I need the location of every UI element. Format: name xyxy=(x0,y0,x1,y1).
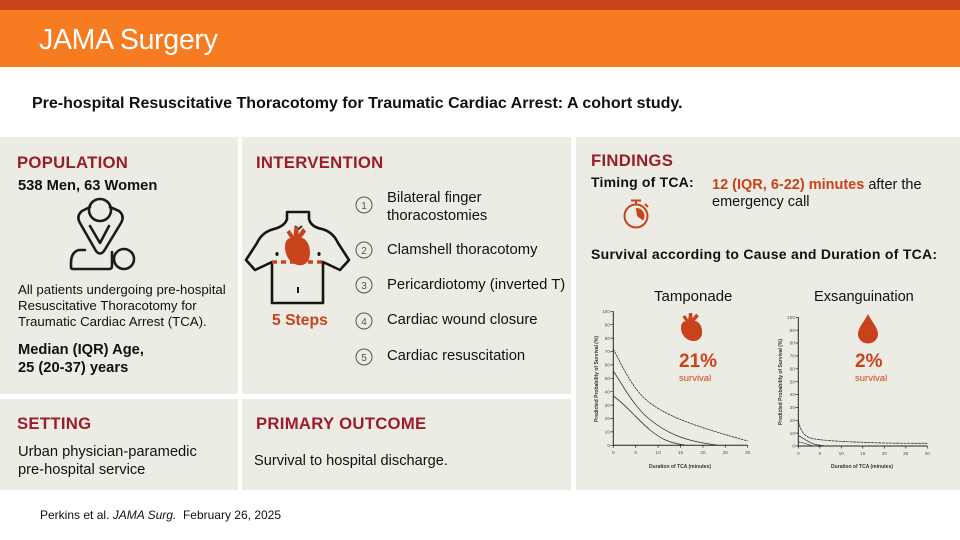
step markers xyxy=(356,196,372,366)
chart: exsanguination survival curve: Predicted Probability of Survival (%) xyxy=(778,339,784,425)
header band xyxy=(0,0,960,67)
icon: blood drop xyxy=(858,314,878,344)
chart: tamponade survival curve: 40 xyxy=(605,389,610,395)
chart: tamponade survival curve: 60 xyxy=(605,363,610,369)
exsanguination percent: 2% xyxy=(855,351,882,372)
chart: tamponade survival curve: 90 xyxy=(605,322,610,328)
chart: exsanguination survival curve: 90 xyxy=(790,328,795,334)
median age: Median (IQR) Age, xyxy=(18,342,144,358)
tamponade survival label: survival xyxy=(679,373,711,384)
panel: population xyxy=(0,137,238,394)
chart: exsanguination survival curve: 15 xyxy=(860,451,866,457)
survival subheading: Survival according to Cause and Duration of TCA: xyxy=(591,246,937,262)
step 1: thoracostomies xyxy=(387,208,487,224)
five steps label: 5 Steps xyxy=(272,312,328,329)
step 4: Cardiac wound closure xyxy=(387,312,538,328)
chart: exsanguination survival curve: 30 xyxy=(925,451,930,457)
chart: exsanguination survival curve xyxy=(778,315,930,470)
timing value xyxy=(712,177,922,210)
chart: exsanguination survival curve: 100 xyxy=(787,315,795,321)
main title: Pre-hospital Resuscitative Thoracotomy for Traumatic Cardiac Arrest: A cohort study. xyxy=(32,95,683,112)
chart: tamponade survival curve: 15 xyxy=(678,450,683,456)
chart: tamponade survival curve: 0 xyxy=(607,443,610,449)
panel: intervention xyxy=(242,137,571,394)
chart: tamponade survival curve: Predicted Probability of Survival (%) xyxy=(594,336,600,422)
setting heading: SETTING xyxy=(17,414,91,433)
step markers: 1 xyxy=(361,201,367,212)
timing value: emergency call xyxy=(712,194,810,210)
icon: stopwatch xyxy=(624,200,649,228)
chart: tamponade survival curve: 20 xyxy=(700,450,706,456)
chart: exsanguination survival curve: Duration of TCA (minutes) xyxy=(831,464,893,470)
findings heading: FINDINGS xyxy=(591,151,673,170)
step markers: 3 xyxy=(361,281,367,292)
chart: tamponade survival curve: 80 xyxy=(605,336,610,342)
chart: tamponade survival curve: 0 xyxy=(612,450,615,456)
step 1: Bilateral finger xyxy=(387,190,482,206)
chart: tamponade survival curve: 5 xyxy=(634,450,637,456)
chart: exsanguination survival curve: 0 xyxy=(792,444,795,450)
panel: setting xyxy=(0,399,238,490)
chart: exsanguination survival curve: 40 xyxy=(790,392,795,398)
step markers: 4 xyxy=(361,317,367,328)
chart: exsanguination survival curve: 70 xyxy=(790,354,795,360)
step markers: 5 xyxy=(361,353,367,364)
outcome heading: PRIMARY OUTCOME xyxy=(256,414,426,433)
population description: Traumatic Cardiac Arrest (TCA). xyxy=(18,314,207,329)
setting text: pre-hospital service xyxy=(18,462,145,478)
panel: findings xyxy=(576,137,960,490)
exsanguination label: Exsanguination xyxy=(814,289,914,305)
journal name: JAMA Surgery xyxy=(39,24,218,56)
chart: tamponade survival curve: 50 xyxy=(605,376,610,382)
chart: tamponade survival curve: 100 xyxy=(602,309,610,315)
chart: tamponade survival curve: 30 xyxy=(745,450,751,456)
chart: tamponade survival curve: 20 xyxy=(605,416,610,422)
chart: exsanguination survival curve: 10 xyxy=(790,431,795,437)
chart: exsanguination survival curve: 0 xyxy=(797,451,800,457)
tamponade percent: 21% xyxy=(679,351,717,372)
chart: tamponade survival curve: 10 xyxy=(605,430,610,436)
step 2: Clamshell thoracotomy xyxy=(387,242,538,258)
step 3: Pericardiotomy (inverted T) xyxy=(387,277,565,293)
chart: tamponade survival curve xyxy=(594,309,751,470)
step 5: Cardiac resuscitation xyxy=(387,348,525,364)
chart: tamponade survival curve: 70 xyxy=(605,349,610,355)
chart: tamponade survival curve: 10 xyxy=(655,450,661,456)
population description: All patients undergoing pre-hospital xyxy=(18,282,226,297)
chart: exsanguination survival curve: 80 xyxy=(790,341,795,347)
population counts: 538 Men, 63 Women xyxy=(18,178,157,194)
median age xyxy=(18,342,144,376)
timing label: Timing of TCA: xyxy=(591,174,694,190)
tamponade label: Tamponade xyxy=(654,288,732,305)
population description xyxy=(18,282,226,329)
step markers: 2 xyxy=(361,246,367,257)
chart: exsanguination survival curve: 20 xyxy=(790,418,795,424)
icon: heart xyxy=(681,313,702,341)
icon: CPR xyxy=(70,198,136,270)
header top stripe xyxy=(0,0,960,10)
setting text xyxy=(18,444,197,478)
chart: tamponade survival curve: 25 xyxy=(723,450,728,456)
setting text: Urban physician-paramedic xyxy=(18,444,197,460)
chart: exsanguination survival curve: 60 xyxy=(790,366,795,372)
chart: exsanguination survival curve: 30 xyxy=(790,405,795,411)
step 1 xyxy=(387,190,487,224)
chart: exsanguination survival curve: 5 xyxy=(818,451,821,457)
citation: Perkins et al. JAMA Surg. February 26, 2025 xyxy=(40,508,281,522)
population description: Resuscitative Thoracotomy for xyxy=(18,298,197,313)
chart: exsanguination survival curve: 50 xyxy=(790,379,795,385)
chart: exsanguination survival curve: 25 xyxy=(903,451,909,457)
chart: exsanguination survival curve: 20 xyxy=(882,451,887,457)
median age: 25 (20-37) years xyxy=(18,360,128,376)
intervention heading: INTERVENTION xyxy=(256,153,384,172)
chart: tamponade survival curve: Duration of TCA (minutes) xyxy=(649,464,711,470)
population heading: POPULATION xyxy=(17,153,128,172)
panel: primary outcome xyxy=(242,399,571,490)
outcome text: Survival to hospital discharge. xyxy=(254,453,448,469)
chart: exsanguination survival curve: 10 xyxy=(839,451,844,457)
icon: torso with heart xyxy=(244,210,350,304)
chart: tamponade survival curve: 30 xyxy=(605,403,610,409)
timing value: 12 (IQR, 6-22) minutes after the xyxy=(712,177,922,193)
exsanguination survival label: survival xyxy=(855,373,887,384)
